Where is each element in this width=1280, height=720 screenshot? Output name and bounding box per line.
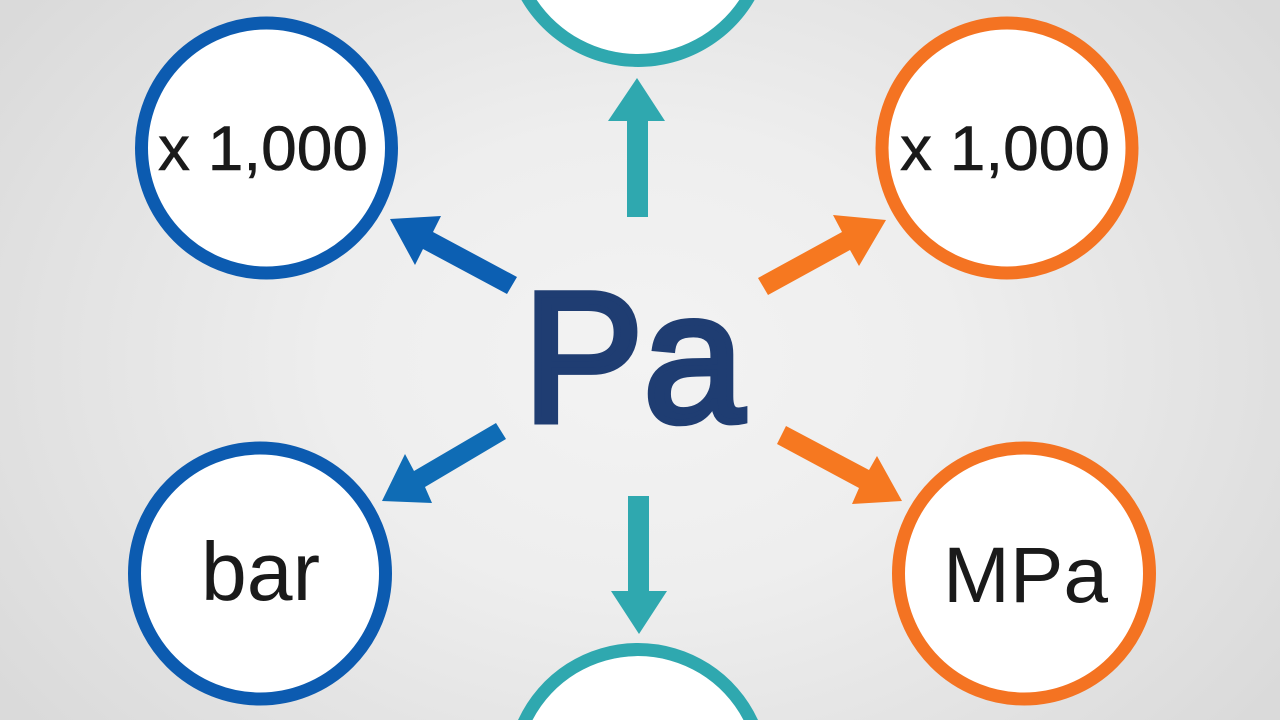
arrow: down teal <box>611 496 667 634</box>
circle: x 1,000 (blue) <box>142 23 392 273</box>
circle: top (teal, cropped) <box>521 0 755 67</box>
arrow: lower right orange <box>777 426 902 504</box>
circle: MPa (orange) <box>898 448 1150 699</box>
center label: Pa: Pa <box>523 255 744 461</box>
arrow: up teal <box>608 78 665 217</box>
arrow: upper left blue <box>390 216 517 294</box>
circle: bar (blue): bar <box>201 525 320 618</box>
circle: bottom (teal, cropped) <box>518 643 758 720</box>
circle: bar (blue) <box>134 448 386 699</box>
circle: x 1,000 (orange) <box>882 23 1132 273</box>
arrow: upper right orange <box>758 215 886 295</box>
circle: x 1,000 (orange): x 1,000 <box>900 114 1110 184</box>
circle: MPa (orange): MPa <box>943 530 1108 619</box>
circle: x 1,000 (blue): x 1,000 <box>158 114 368 184</box>
arrow: lower left blue <box>382 423 506 503</box>
